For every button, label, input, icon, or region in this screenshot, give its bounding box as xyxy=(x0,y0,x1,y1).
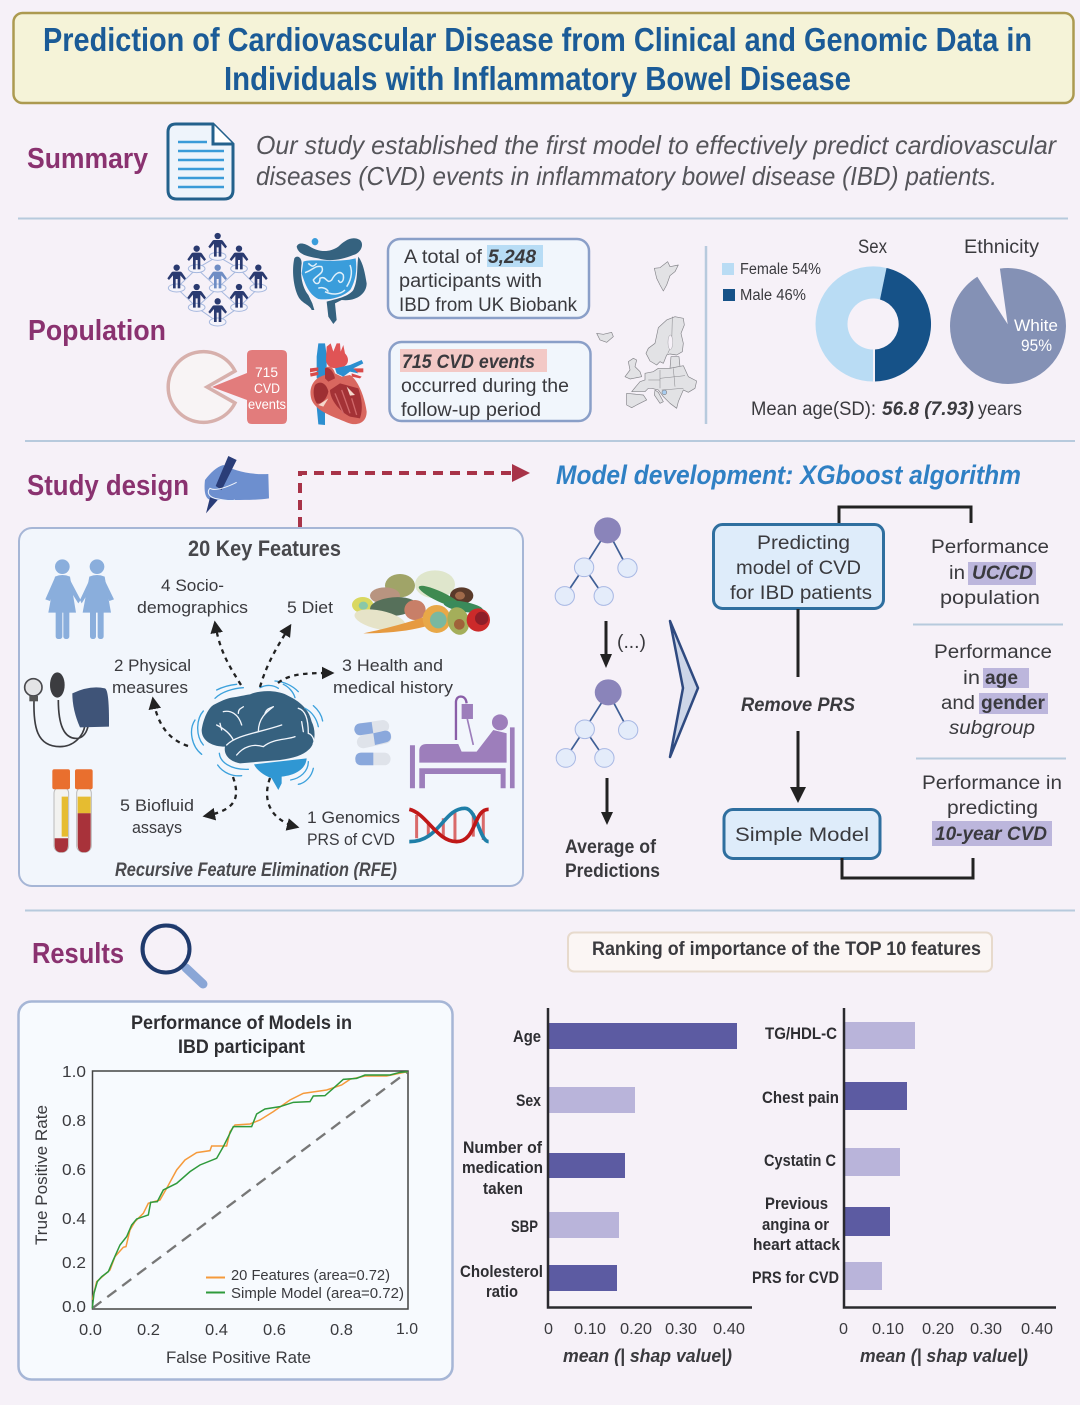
text: socio-demographics: 4 Socio- xyxy=(161,577,224,595)
pie chart: ethnicity: White xyxy=(1014,317,1058,335)
bar labels: Cholesterol xyxy=(460,1263,543,1281)
x axis ticks: 0.4 xyxy=(205,1322,228,1339)
axis ticks: 0.10 xyxy=(574,1321,606,1338)
bar labels: Age xyxy=(513,1028,541,1046)
box: predicting model: model of CVD xyxy=(736,558,861,579)
axis ticks xyxy=(544,1321,745,1338)
axis ticks: 0.30 xyxy=(970,1321,1002,1338)
heading: study design: Study design xyxy=(27,470,189,502)
icon: document xyxy=(168,124,233,199)
bars xyxy=(549,1023,737,1291)
text box: CVD events xyxy=(390,342,590,421)
text: recursive feature elimination: Recursive Feature Elimination (RFE) xyxy=(115,860,397,881)
text: physical measures: 2 Physical xyxy=(114,657,191,675)
icon: brain xyxy=(192,681,323,790)
y axis ticks: 0.4 xyxy=(62,1211,86,1228)
icon: blood pressure monitor xyxy=(25,672,109,747)
callout text: 715 CVD events: 715 xyxy=(255,365,278,380)
y axis label: True Positive Rate xyxy=(32,1105,51,1245)
icon: chevron xyxy=(670,621,698,757)
mean age: years xyxy=(978,399,1022,420)
box: predicting model: Predicting xyxy=(757,533,850,554)
bar labels: TG/HDL-C xyxy=(765,1025,837,1043)
performance: UC/CD: in xyxy=(949,563,965,584)
bar labels: Previous xyxy=(765,1195,828,1213)
panel: 20 key features xyxy=(19,528,523,886)
performance: 10-year CVD: predicting xyxy=(947,798,1038,819)
box: predicting model xyxy=(714,524,884,608)
bar chart: top features right xyxy=(752,1008,1056,1366)
arrow to simple model xyxy=(790,731,806,803)
panel heading: 20 Key Features xyxy=(188,536,341,561)
icon: heart xyxy=(310,343,367,425)
text: diet: 5 Diet xyxy=(287,599,333,617)
summary text: diseases (CVD) events in inflammatory bowel disease (IBD) patients. xyxy=(256,161,997,191)
ranking heading box: Ranking of importance of the TOP 10 features xyxy=(592,939,981,960)
performance: UC/CD: UC/CD xyxy=(972,563,1033,584)
bar labels: medication xyxy=(462,1159,543,1177)
icon: decision trees xyxy=(555,517,638,767)
chart title: Performance of Models in xyxy=(131,1013,352,1034)
icon: intestine xyxy=(293,238,367,324)
dashed arrows from brain xyxy=(153,623,332,827)
axis ticks: 0 xyxy=(839,1321,848,1338)
x axis ticks: 0.6 xyxy=(263,1322,286,1339)
icon: pie with 715 CVD events callout xyxy=(168,350,287,424)
performance: age and gender: age xyxy=(985,668,1018,689)
box: simple model: Simple Model xyxy=(735,825,869,846)
text: physical measures: measures xyxy=(112,679,188,697)
bar chart: top features left xyxy=(460,1008,752,1366)
performance: age and gender xyxy=(934,642,1052,739)
mean age: 56.8 (7.93) xyxy=(882,399,974,420)
text: socio-demographics: demographics xyxy=(137,599,248,617)
map of Europe xyxy=(597,262,697,408)
chart title: IBD participant xyxy=(178,1037,306,1058)
icon: people network xyxy=(167,233,268,326)
pie chart: ethnicity: 95% xyxy=(1021,337,1052,355)
bar labels: PRS for CVD xyxy=(752,1269,839,1287)
text: average of predictions: Average of xyxy=(565,837,657,858)
text: physical measures xyxy=(112,657,191,697)
pie chart: ethnicity xyxy=(950,268,1066,384)
arrow between trees: (...) xyxy=(617,632,646,653)
heading: results: Results xyxy=(32,938,124,970)
x axis ticks xyxy=(79,1321,418,1339)
performance: age and gender: and xyxy=(941,693,975,714)
text box: participants: IBD from UK Biobank xyxy=(399,295,577,316)
x axis ticks: 0.8 xyxy=(330,1322,353,1339)
y axis ticks: 1.0 xyxy=(62,1064,86,1081)
text: genomics: 1 Genomics xyxy=(307,809,400,827)
summary text: Our study established the first model to effectively predict cardiovascular xyxy=(256,130,1057,160)
text: socio-demographics xyxy=(137,577,248,617)
text: health history: 3 Health and xyxy=(342,657,443,675)
bar labels: Chest pain xyxy=(762,1089,839,1107)
icon: food xyxy=(352,570,490,637)
heading: model development: Model development: XGboost algorithm xyxy=(556,460,1021,490)
y axis ticks xyxy=(62,1064,86,1316)
performance: UC/CD: population xyxy=(940,588,1040,609)
text box: participants xyxy=(388,239,589,318)
y axis ticks: 0.6 xyxy=(62,1162,86,1179)
y axis ticks: 0.8 xyxy=(62,1113,86,1130)
icon: blood tubes xyxy=(52,769,93,852)
title xyxy=(14,13,1074,103)
text box: participants: A total of xyxy=(404,247,483,268)
text box: CVD events: 715 CVD events xyxy=(402,352,535,373)
x axis ticks: 1.0 xyxy=(396,1321,418,1338)
line to remove PRS xyxy=(796,609,800,677)
axis ticks: 0 xyxy=(544,1321,553,1338)
box: predicting model: for IBD patients xyxy=(730,583,872,604)
performance: UC/CD xyxy=(931,537,1049,609)
performance: 10-year CVD: 10-year CVD xyxy=(935,824,1047,845)
dashed arrow to model development xyxy=(300,464,530,527)
x axis label: False Positive Rate xyxy=(166,1348,311,1367)
axis ticks: 0.20 xyxy=(922,1321,954,1338)
icon: DNA xyxy=(409,808,489,842)
performance: 10-year CVD xyxy=(922,773,1062,846)
bar labels: ratio xyxy=(486,1283,518,1301)
bar labels: Cystatin C xyxy=(764,1152,836,1170)
text: biofluid assays: assays xyxy=(132,819,182,837)
bars xyxy=(845,1022,915,1290)
bar labels: heart attack xyxy=(753,1236,841,1254)
chart legend: 20 Features (area=0.72) xyxy=(231,1268,390,1284)
ranking heading box xyxy=(568,932,992,972)
axis ticks: 0.40 xyxy=(1021,1321,1053,1338)
axis ticks xyxy=(839,1321,1053,1338)
bar labels: Sex xyxy=(516,1092,542,1110)
heading: ethnicity: Ethnicity xyxy=(964,237,1040,258)
box: simple model xyxy=(724,810,880,858)
icon: two people xyxy=(45,559,114,639)
axis label: mean (| shap value|) xyxy=(860,1346,1028,1366)
performance: age and gender: in xyxy=(963,668,980,689)
legend: sex: Male 46% xyxy=(740,287,806,304)
mean age xyxy=(751,399,1022,420)
x axis ticks: 0.0 xyxy=(79,1322,102,1339)
text: remove PRS: Remove PRS xyxy=(741,695,855,716)
ROC curves xyxy=(92,1072,408,1308)
arrow to average xyxy=(601,778,613,825)
text box: participants: participants with xyxy=(399,271,542,292)
axis ticks: 0.40 xyxy=(713,1321,745,1338)
connector top xyxy=(839,507,971,525)
x axis ticks: 0.2 xyxy=(137,1322,160,1339)
heading: summary: Summary xyxy=(27,143,148,175)
heading: sex: Sex xyxy=(858,237,887,258)
legend: sex xyxy=(722,261,821,304)
icon: magnifier xyxy=(142,925,203,984)
text: genomics: PRS of CVD xyxy=(307,831,395,849)
performance: age and gender: subgroup xyxy=(949,718,1035,739)
text: average of predictions xyxy=(565,837,660,882)
callout text: 715 CVD events: CVD xyxy=(254,381,280,396)
axis ticks: 0.30 xyxy=(665,1321,697,1338)
summary text xyxy=(256,130,1057,191)
bar labels: taken xyxy=(483,1180,523,1198)
y axis ticks: 0.0 xyxy=(62,1299,86,1316)
performance: 10-year CVD: Performance in xyxy=(922,773,1062,794)
icon: hospital bed xyxy=(410,697,515,788)
title: Individuals with Inflammatory Bowel Disease xyxy=(224,60,851,97)
text: biofluid assays xyxy=(120,797,194,837)
mean age: Mean age(SD): xyxy=(751,399,876,420)
performance: UC/CD: Performance xyxy=(931,537,1049,558)
panel: ROC chart xyxy=(18,1002,452,1380)
legend: sex: Female 54% xyxy=(740,261,821,278)
chart legend xyxy=(206,1268,404,1302)
text: health history: medical history xyxy=(333,679,454,697)
chart legend: Simple Model (area=0.72) xyxy=(231,1286,404,1302)
performance: age and gender: Performance xyxy=(934,642,1052,663)
heading: population: Population xyxy=(28,315,166,347)
axis label: mean (| shap value|) xyxy=(563,1346,732,1366)
donut chart: sex xyxy=(815,266,931,382)
chart title xyxy=(131,1013,352,1058)
plot frame xyxy=(92,1071,408,1309)
bar labels xyxy=(460,1028,543,1301)
bar labels: Number of xyxy=(463,1139,542,1157)
text: average of predictions: Predictions xyxy=(565,861,660,882)
icon: hand writing xyxy=(205,456,269,513)
bar labels: angina or xyxy=(762,1216,830,1234)
arrow between trees xyxy=(600,621,646,668)
axis ticks: 0.20 xyxy=(620,1321,652,1338)
performance: age and gender: gender xyxy=(981,693,1046,714)
axis ticks: 0.10 xyxy=(872,1321,904,1338)
text: health history xyxy=(333,657,454,697)
text box: participants: 5,248 xyxy=(488,247,536,268)
bar labels xyxy=(752,1025,841,1287)
y axis ticks: 0.2 xyxy=(62,1255,86,1272)
text box: CVD events: follow-up period xyxy=(401,400,541,421)
connector bottom xyxy=(842,858,973,878)
bar labels: SBP xyxy=(511,1218,538,1236)
text: genomics xyxy=(307,809,400,849)
text box: CVD events: occurred during the xyxy=(401,376,569,397)
callout text: 715 CVD events: events xyxy=(248,397,286,412)
callout text: 715 CVD events xyxy=(248,365,286,412)
icon: capsules xyxy=(354,719,393,765)
text: biofluid assays: 5 Biofluid xyxy=(120,797,194,815)
